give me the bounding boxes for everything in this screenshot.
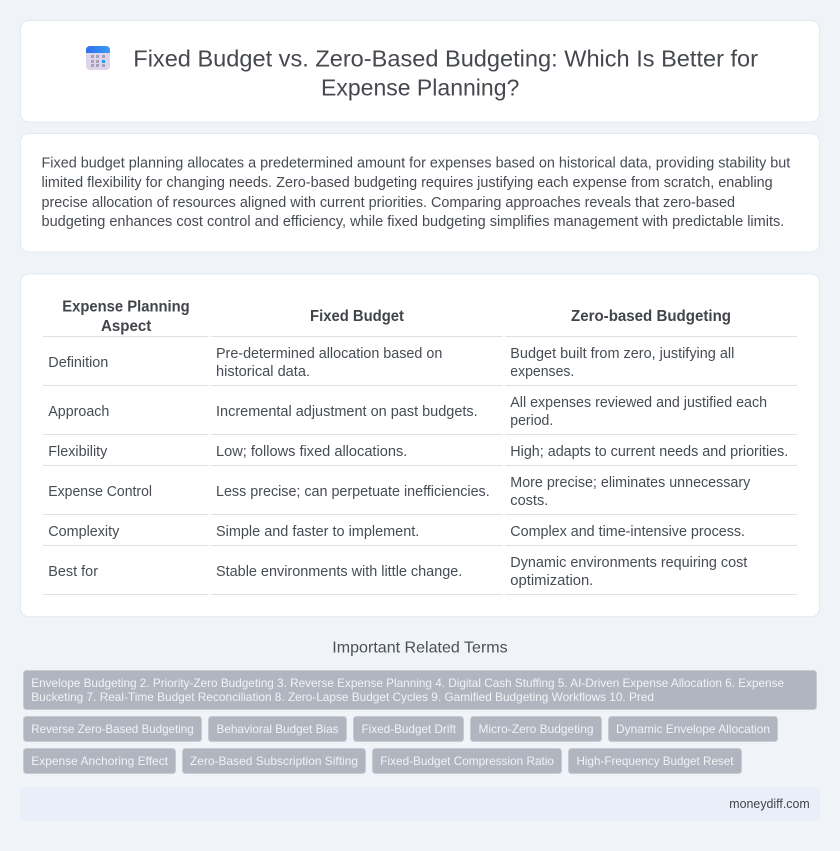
- row: definition: Definition: [48, 355, 108, 371]
- table header row: Expense Planning: [62, 299, 190, 316]
- row: approach: Incremental adjustment on past budgets.: [216, 404, 478, 420]
- title: Expense Planning?: [321, 75, 519, 101]
- tag: [354, 716, 464, 742]
- row: best for: [48, 555, 747, 589]
- tag: Reverse Zero-Based Budgeting: [31, 722, 194, 736]
- row: flexibility: [48, 444, 788, 460]
- row: definition: Budget built from zero, justifying all: [510, 346, 734, 362]
- tag: long list: Envelope Budgeting 2. Priority-Zero Budgeting 3. Reverse Expense Planning 4. Digital Cash Stuffing 5. AI-Driven Expense Allocation 6. Expense: [31, 676, 784, 690]
- row: expense control: More precise; eliminates unnecessary: [510, 475, 751, 491]
- footer source text: moneydiff.com: [729, 796, 810, 811]
- footer bar: [20, 787, 820, 821]
- tag: [24, 748, 176, 774]
- row: expense control: Less precise; can perpetuate inefficiencies.: [216, 484, 490, 500]
- row: best for: Dynamic environments requiring cost: [510, 555, 747, 571]
- tag: long list: Bucketing 7. Real-Time Budget Reconciliation 8. Zero-Lapse Budget Cycles 9. Gamified Budgeting Workflows 10. Pred: [31, 690, 654, 704]
- title: Fixed Budget vs. Zero-Based Budgeting: Which Is Better for: [133, 46, 758, 72]
- row: approach: period.: [510, 413, 553, 429]
- tag: Zero-Based Subscription Sifting: [190, 754, 358, 768]
- tag: [470, 716, 602, 742]
- row: definition: historical data.: [216, 364, 310, 380]
- row: approach: [48, 395, 767, 429]
- row: expense control: [48, 475, 751, 509]
- row: definition: [48, 346, 734, 380]
- table header row: Zero-based Budgeting: [571, 308, 731, 325]
- row: best for: Best for: [48, 564, 98, 580]
- row: expense control: Expense Control: [48, 484, 152, 500]
- row: definition: Pre-determined allocation based on: [216, 346, 442, 362]
- tag: High-Frequency Budget Reset: [576, 754, 734, 768]
- header panel: [20, 20, 820, 122]
- tag: Fixed-Budget Drift: [362, 722, 457, 736]
- row: best for: optimization.: [510, 573, 593, 589]
- tag: [608, 716, 778, 742]
- row: flexibility: Flexibility: [48, 444, 108, 460]
- tag: Behavioral Budget Bias: [216, 722, 338, 736]
- tag: Dynamic Envelope Allocation: [616, 722, 770, 736]
- row: flexibility: Low; follows fixed allocations.: [216, 444, 407, 460]
- row: definition: expenses.: [510, 364, 574, 380]
- table header row: Fixed Budget: [310, 308, 404, 325]
- row: approach: All expenses reviewed and justified each: [510, 395, 767, 411]
- row: complexity: Complexity: [48, 524, 120, 540]
- tag: Expense Anchoring Effect: [31, 754, 169, 768]
- tag: [568, 748, 742, 774]
- row: complexity: Simple and faster to implement.: [216, 524, 419, 540]
- intro text block: [42, 156, 790, 230]
- tag: [372, 748, 562, 774]
- intro text block: budgeting enhances cost control and efficiency, while fixed budgeting simplifies management with predictable limits.: [42, 214, 784, 230]
- table header row: [62, 299, 731, 335]
- title: [133, 46, 758, 101]
- heading: important related terms: Important Related Terms: [332, 640, 508, 657]
- tag: long list: [24, 670, 816, 710]
- row: flexibility: High; adapts to current needs and priorities.: [510, 444, 788, 460]
- intro text block: precise allocation of resources aligned with current priorities. Comparing approaches reveals that zero-based: [42, 195, 735, 211]
- intro text block: limited flexibility for changing needs. Zero-based budgeting requires justifying each expense from scratch, enabling: [42, 175, 773, 191]
- icon: calendar: [86, 46, 110, 70]
- tag: Micro-Zero Budgeting: [478, 722, 594, 736]
- panel: comparison table: [20, 274, 820, 617]
- row: complexity: [48, 524, 745, 540]
- row: complexity: Complex and time-intensive process.: [510, 524, 745, 540]
- intro text block: Fixed budget planning allocates a predetermined amount for expenses based on historical data, providing stability but: [42, 156, 790, 172]
- panel: related term tags: [24, 670, 816, 774]
- row: best for: Stable environments with little change.: [216, 564, 462, 580]
- tag: [208, 716, 346, 742]
- row: expense control: costs.: [510, 493, 548, 509]
- panel: intro paragraph: [20, 134, 820, 252]
- table header row: Aspect: [101, 318, 151, 335]
- tag: [24, 716, 202, 742]
- tag: Fixed-Budget Compression Ratio: [380, 754, 554, 768]
- tag: [182, 748, 366, 774]
- row: approach: Approach: [48, 404, 109, 420]
